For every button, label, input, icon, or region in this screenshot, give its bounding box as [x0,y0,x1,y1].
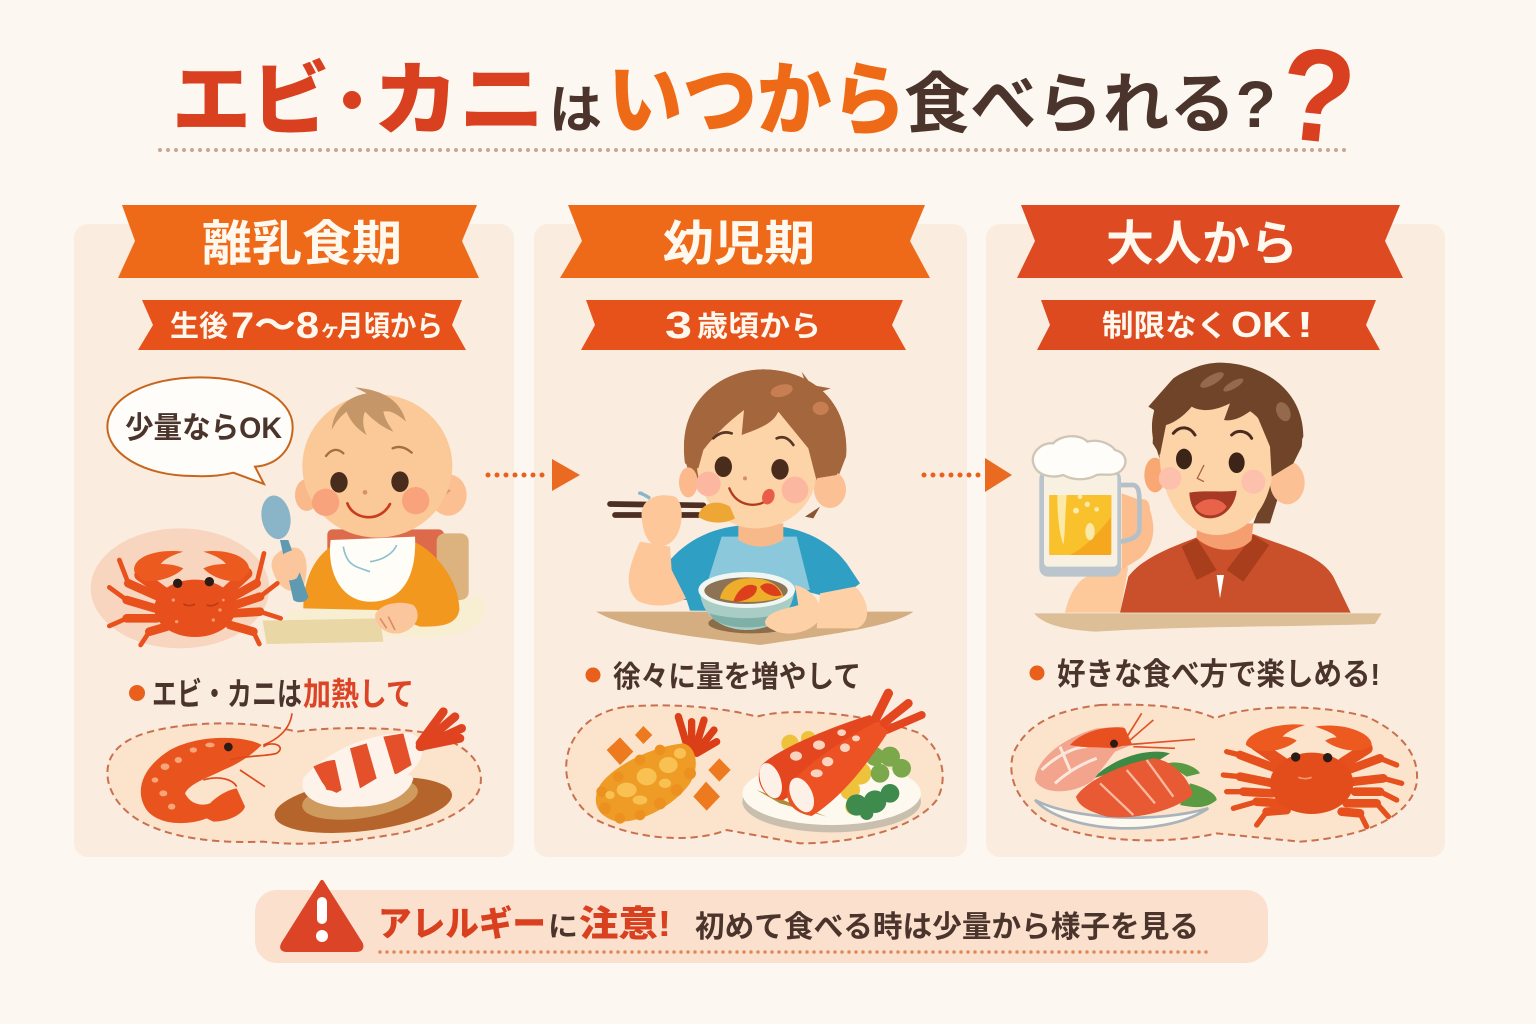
ribbon: 3歳頃から: 3 [665,305,692,347]
food: fried shrimp and plated shrimp [566,693,943,843]
title: カニ [373,56,545,145]
illustration: adult with beer mug [1033,363,1382,632]
icon: warning triangle [282,882,361,950]
ribbon: 生後7〜8ヶ月頃から: 7〜8 [231,305,319,346]
bullet text: エビ・カニは加熱して: エビ・カニは [152,676,302,712]
warning heading: 注意! [579,903,671,944]
high chair [263,529,485,644]
food: shrimp and cooked shrimp on plate [107,712,481,844]
warning bar [255,882,1268,963]
bullet text: 好きな食べ方で楽しめる!: 好きな食べ方で楽しめる! [1057,657,1380,692]
ribbon heading: 大人から [1017,205,1403,278]
crab [1223,724,1402,827]
beer mug [1033,436,1140,577]
title: いつから [608,56,906,145]
boy [610,369,867,634]
warning heading: アレルギー [378,905,546,944]
arrow 1 [488,459,580,491]
illustration: boy with chopsticks and bowl [596,369,913,645]
title [172,19,1362,173]
ribbon heading: 大人から: 大人から [1106,218,1298,271]
ribbon: 制限なくOK!: OK [1231,304,1291,345]
title: ? [1273,19,1362,173]
ribbon heading: 離乳食期 [118,205,479,278]
warning text: 初めて食べる時は少量から様子を見る [695,911,1199,944]
bullet text: 徐々に量を増やして: 徐々に量を増やして [613,661,861,694]
panel: 離乳食期 [74,205,514,857]
ribbon: 制限なくOK!: ! [1297,304,1313,345]
ribbon heading: 離乳食期: 離乳食期 [202,218,402,271]
panel: 幼児期 [534,205,967,857]
ribbon: 生後7〜8ヶ月頃から: 月頃から [337,311,443,343]
plate with shrimp and vegetables [742,693,922,832]
arrow 2 [924,458,1012,492]
table [1034,613,1382,632]
ribbon: 3歳頃から [581,300,906,350]
bullet text: エビ・カニは加熱して: 加熱して [303,676,414,712]
sashimi plate [1035,713,1217,828]
ribbon heading: 幼児期: 幼児期 [663,218,815,271]
baby [258,387,467,634]
bowl [698,572,795,633]
ribbon: 生後7〜8ヶ月頃から: ヶ [320,319,340,341]
man [1065,363,1351,613]
tempura [596,717,731,824]
illustration: baby with spoon and crab [91,377,485,648]
ribbon: 生後7〜8ヶ月頃から: 生後 [170,310,228,343]
plated shrimp [271,712,462,842]
title: は [549,82,602,140]
ribbon: 生後7〜8ヶ月頃から [138,300,466,350]
speech bubble text: 少量ならOK [125,412,282,445]
bullet text: エビ・カニは加熱して [129,676,414,712]
warning heading [378,903,671,944]
ribbon: 制限なくOK! [1037,300,1380,350]
spoon [258,493,308,602]
table [596,612,913,645]
speech bubble [107,377,293,484]
crab [109,551,281,645]
food: sashimi and crab [1011,705,1417,842]
warning heading: に [548,911,578,942]
panel: 大人から [986,205,1445,857]
chopsticks and food [610,493,735,523]
title: エビ [172,56,330,145]
ribbon heading: 幼児期 [560,205,930,278]
title: 食べられる? [904,67,1276,141]
shrimp [141,713,292,823]
ribbon: 3歳頃から: 歳頃から [697,310,821,343]
ribbon: 制限なくOK!: 制限なく [1102,310,1228,343]
crab backdrop [91,528,269,648]
